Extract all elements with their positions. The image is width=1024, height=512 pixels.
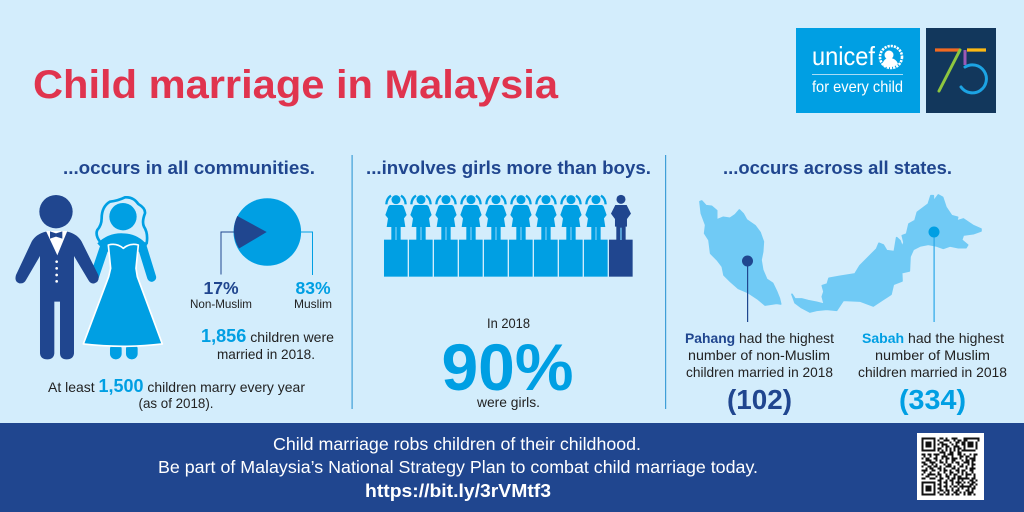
stat: 83% Muslim: Muslim — [294, 297, 332, 311]
footer text — [158, 434, 758, 501]
text: Sabah highest: Sabah had the highest — [862, 330, 1004, 346]
stat: 17% non-Muslim: 17% — [203, 278, 239, 298]
marker: Pahang — [742, 256, 753, 322]
stat: 102: (102) — [727, 384, 792, 415]
text: In 2018: In 2018 — [487, 315, 530, 331]
marker: Sabah — [928, 226, 940, 322]
stat: 334: (334) — [899, 384, 966, 415]
title: Child marriage in Malaysia — [33, 63, 559, 107]
icon: groom — [15, 195, 99, 359]
text: Pahang highest — [685, 330, 834, 380]
footer text: Child marriage robs children of their childhood. — [273, 434, 641, 454]
stat: 83% Muslim — [294, 278, 332, 311]
text: children married in 2018: 1,856 children were — [201, 326, 334, 346]
footer text: Be part of Malaysia’s National Strategy Plan to combat child marriage today. — [158, 457, 758, 477]
footer band — [0, 423, 1024, 512]
pie chart: religion split — [221, 198, 312, 275]
text: Sabah highest — [858, 330, 1007, 380]
text: Sabah highest: children married in 2018 — [858, 364, 1007, 380]
text: Sabah highest: number of Muslim — [875, 347, 990, 363]
map: Malaysia — [700, 195, 981, 312]
heading: occurs in all communities: ...occurs in all communities. — [63, 158, 315, 178]
text: children marry every year — [48, 376, 305, 411]
text: Pahang highest: Pahang had the highest — [685, 330, 834, 346]
QR code — [917, 433, 984, 500]
logo: unicef for every child — [796, 28, 920, 113]
text: children marry every year: At least 1,500 children marry every year — [48, 376, 305, 396]
stat: 90%: 90% — [442, 330, 574, 404]
stat: 17% non-Muslim: Non-Muslim — [190, 297, 252, 311]
icon: bride — [83, 197, 162, 359]
heading: involves girls more than boys: ...involves girls more than boys. — [366, 158, 651, 178]
chart: nine girls and one boy — [384, 195, 633, 277]
text: were girls: were girls. — [476, 394, 540, 410]
text: children married in 2018: married in 2018. — [217, 346, 315, 362]
text: Pahang highest: children married in 2018 — [686, 364, 833, 380]
logo: unicef for every child: for every child — [812, 79, 903, 96]
footer text: https://bit.ly/3rVMtf3 — [365, 481, 551, 501]
stat: 83% Muslim: 83% — [295, 278, 331, 298]
text: Pahang highest: number of non-Muslim — [688, 347, 830, 363]
logo: UNICEF 75 — [926, 28, 996, 113]
text: children marry every year: (as of 2018). — [138, 395, 214, 411]
heading: occurs across all states: ...occurs across all states. — [723, 158, 952, 178]
logo: unicef for every child: unicef — [812, 41, 876, 71]
text: children married in 2018 — [201, 326, 334, 362]
stat: 17% non-Muslim — [190, 278, 252, 311]
